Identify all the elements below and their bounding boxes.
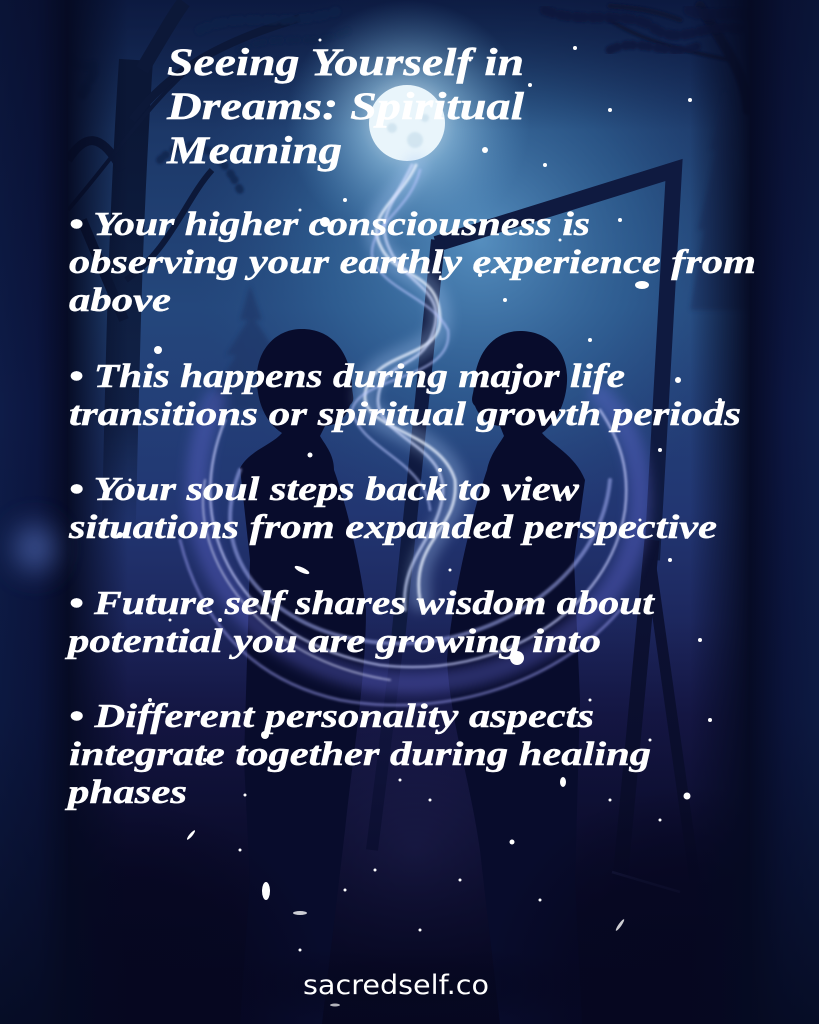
bullet: higher consciousness: • Your higher consciousness is bbox=[69, 206, 590, 243]
moon bbox=[369, 85, 445, 161]
bullet: life transitions bbox=[69, 358, 741, 433]
floor glow bbox=[245, 680, 585, 1020]
ring glow bbox=[197, 395, 640, 683]
inner vignette left bbox=[68, 0, 128, 1024]
title: Meaning bbox=[166, 129, 342, 172]
moon glow bbox=[286, 0, 530, 244]
right tree bbox=[610, 6, 748, 110]
left tree foliage bbox=[70, 10, 350, 190]
right foliage bbox=[545, 10, 745, 50]
ground shadow left bbox=[68, 800, 330, 1024]
footer website: sacredself.co bbox=[303, 970, 489, 1001]
right silhouette bbox=[447, 331, 585, 1024]
bullet: personality aspects bbox=[64, 698, 651, 811]
bullet: higher consciousness bbox=[69, 206, 756, 319]
teal mirror glow bbox=[0, 0, 819, 620]
moon craters bbox=[387, 114, 429, 148]
ring strands bbox=[210, 410, 626, 667]
left silhouette bbox=[240, 329, 366, 1024]
distant pines bbox=[205, 90, 762, 410]
mirror frame bbox=[372, 170, 695, 892]
bullet: personality aspects: phases bbox=[64, 774, 187, 811]
ground shadow right bbox=[485, 785, 750, 1024]
title bbox=[166, 41, 524, 172]
lower darkness bbox=[0, 620, 819, 1024]
left tree bbox=[68, 2, 300, 560]
side panel glow bbox=[15, 524, 55, 572]
moon ribbon glow bbox=[365, 165, 455, 600]
top darkening bbox=[0, 0, 819, 130]
bullet: life transitions: • This happens during major life bbox=[69, 358, 625, 395]
swirling light ribbons bbox=[180, 165, 640, 705]
bullet: expanded perspective: • Your soul steps back to view bbox=[69, 471, 579, 508]
side panels bbox=[0, 0, 68, 1024]
bullet: higher consciousness: above bbox=[69, 282, 171, 319]
drifting petals and sparkles bbox=[117, 38, 722, 1006]
title: Seeing Yourself in bbox=[167, 41, 524, 84]
bullet: expanded perspective bbox=[68, 471, 717, 546]
moon ribbon strands bbox=[365, 165, 455, 600]
bullet: personality aspects: • Different personality aspects bbox=[69, 698, 594, 735]
title: Dreams: Spiritual bbox=[166, 85, 524, 128]
bullet: expanded perspective: situations from expanded perspective bbox=[68, 509, 717, 546]
side panel shading bbox=[0, 0, 68, 1024]
bullet: future self: • Future self shares wisdom about bbox=[69, 585, 656, 622]
inner vignette right bbox=[690, 0, 750, 1024]
bullet: personality aspects: integrate together during healing bbox=[69, 736, 651, 773]
bullet: higher consciousness: observing your earthly experience from bbox=[69, 244, 756, 281]
ground shadow centre bbox=[190, 947, 630, 1023]
bullet: future self bbox=[64, 585, 656, 660]
bullet: future self: potential you are growing into bbox=[64, 623, 601, 660]
bullet: life transitions: transitions or spiritual growth periods bbox=[69, 396, 741, 433]
